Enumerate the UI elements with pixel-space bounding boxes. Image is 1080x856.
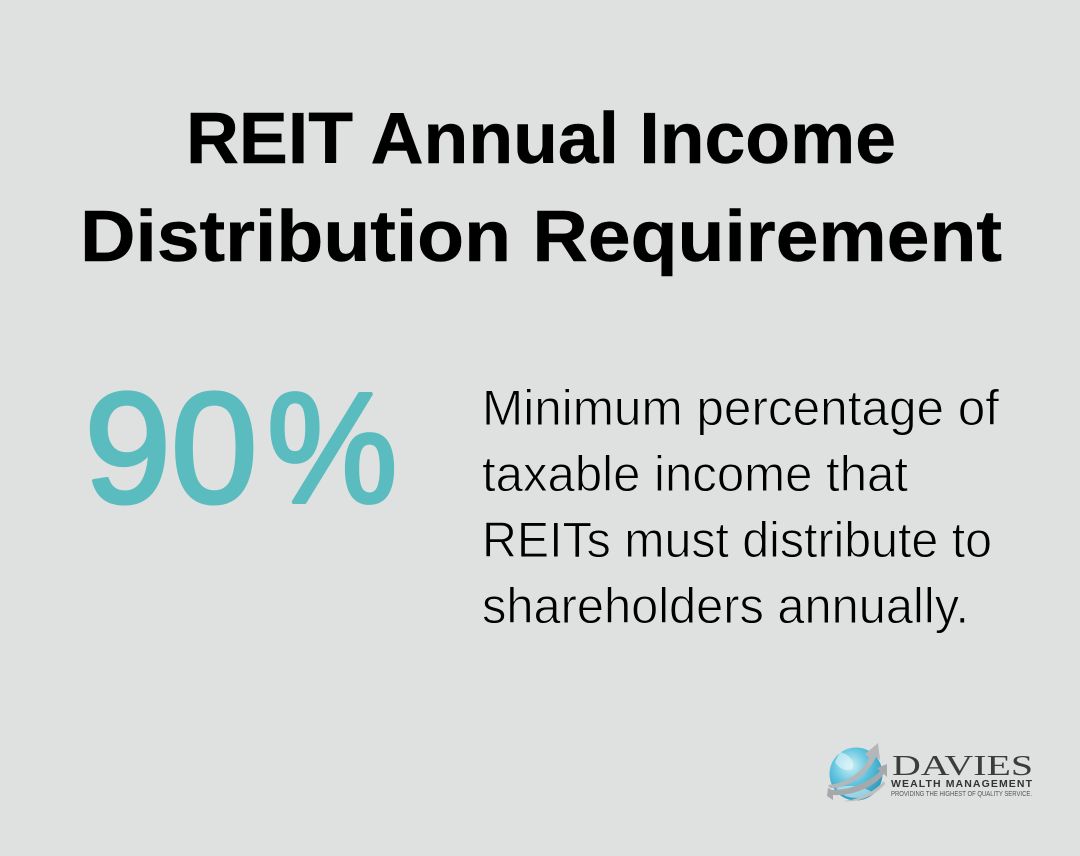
icon: globe with arrows	[827, 743, 887, 801]
title: REIT Annual Income	[186, 99, 896, 179]
big statistic: 90%	[84, 361, 398, 536]
description text: REITs must distribute to	[482, 512, 992, 568]
big statistic: 90%: %	[267, 361, 398, 536]
title: Distribution Requirement	[80, 197, 1002, 277]
logo subtitle: WEALTH MANAGEMENT	[891, 778, 1033, 790]
logo: Davies Wealth Management	[827, 743, 1033, 801]
logo wordmark: DAVIES	[892, 750, 1033, 782]
big statistic: 90%: 90	[84, 361, 258, 536]
title	[80, 99, 1002, 277]
description text: shareholders annually.	[482, 578, 969, 634]
logo tagline: PROVIDING THE HIGHEST OF QUALITY SERVICE.	[891, 791, 1032, 798]
description text	[482, 380, 999, 634]
description text: Minimum percentage of	[482, 380, 999, 436]
description text: taxable income that	[482, 446, 908, 502]
